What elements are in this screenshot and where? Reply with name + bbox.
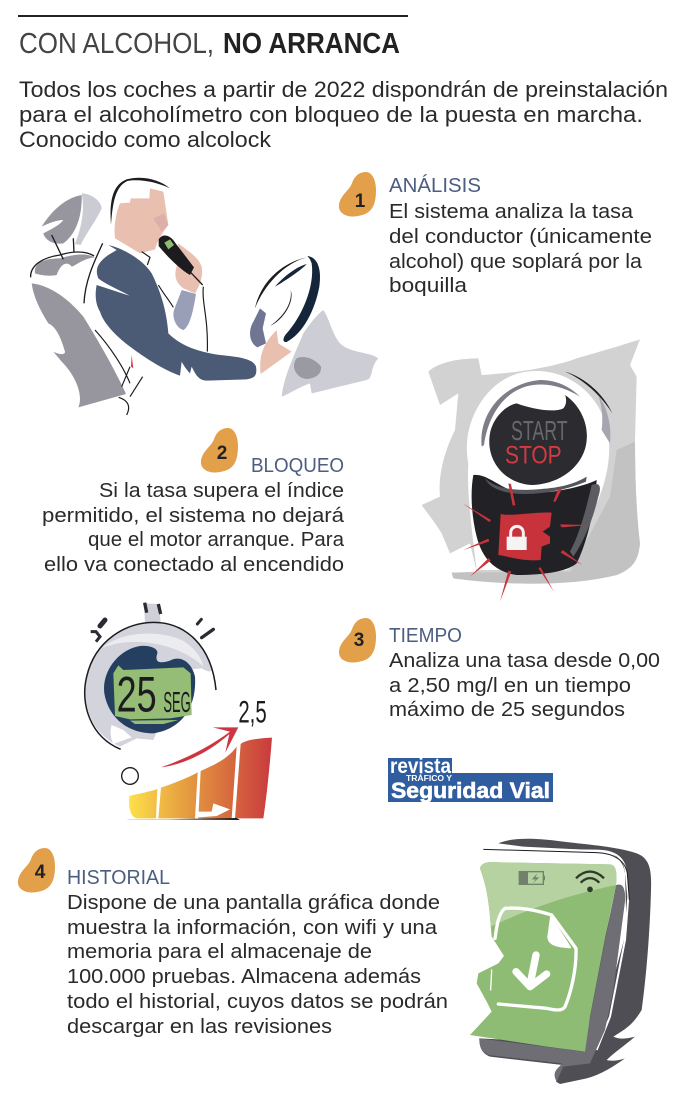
- red lock: [498, 513, 552, 560]
- text: análisis: del conductor (únicamente: [389, 226, 652, 248]
- breathalyzer: [159, 235, 194, 275]
- jacket: [96, 245, 256, 381]
- text: tiempo: a 2,50 mg/l en un tiempo: [389, 675, 631, 697]
- intro text: Conocido como alcolock: [19, 127, 272, 152]
- button bezel: [467, 371, 609, 570]
- logo: revista tráfico y seguridad vial: [388, 755, 553, 803]
- stopwatch: [85, 603, 216, 749]
- text: tiempo: [389, 625, 660, 721]
- text: bloqueo: ello va conectado al encendido: [44, 554, 344, 576]
- headrest and seat: [31, 193, 143, 415]
- text: historial: Dispone de una pantalla gráfica donde: [67, 892, 440, 914]
- text: análisis: [389, 174, 652, 297]
- illustration: start stop button: [422, 339, 640, 602]
- stopwatch: SEG: [163, 687, 191, 719]
- grey panel: [422, 339, 640, 584]
- badge 4: [18, 848, 55, 893]
- shirt lines: [142, 252, 207, 352]
- timer label: 25: [117, 666, 157, 722]
- badge 1: [339, 172, 376, 217]
- hand on wheel: [260, 330, 292, 374]
- badge 3: [339, 618, 376, 663]
- dashboard: [282, 310, 378, 397]
- steering wheel: [255, 257, 307, 308]
- text: análisis: boquilla: [389, 275, 468, 297]
- head: [115, 188, 168, 253]
- screen: [470, 862, 616, 1052]
- black lower housing: [472, 475, 597, 575]
- red rays: [463, 483, 590, 602]
- stop label: STOP: [505, 441, 562, 469]
- intro text: Todos los coches a partir de 2022 dispondrán de preinstalación: [19, 77, 668, 102]
- text: historial: todo el historial, cuyos datos se podrán: [67, 991, 448, 1013]
- title: CON ALCOHOL,: [19, 28, 214, 60]
- text: análisis: El sistema analiza la tasa: [389, 201, 634, 223]
- text: análisis: ANÁLISIS: [389, 174, 481, 197]
- icon: file download: [491, 908, 576, 1010]
- intro text: para el alcoholímetro con bloqueo de la puesta en marcha.: [19, 102, 643, 127]
- text: bloqueo: [42, 455, 345, 576]
- gauge value: 2,5: [238, 694, 267, 730]
- illustration: device with download: [470, 839, 651, 1084]
- logo: revista tráfico y seguridad vial: Seguridad Vial: [391, 778, 550, 803]
- illustration: driver blowing into breathalyzer: [31, 178, 378, 415]
- badge 3: 3: [354, 630, 364, 651]
- text: historial: muestra la información, con wifi y una: [67, 917, 438, 939]
- text: historial: memoria para el almacenaje de: [67, 941, 372, 963]
- icon: wifi: [576, 872, 604, 891]
- text: historial: [67, 867, 448, 1038]
- badge 2: [201, 428, 238, 473]
- text: bloqueo: Si la tasa supera el índice: [99, 480, 344, 502]
- intro text: [19, 77, 668, 152]
- text: bloqueo: que el motor arranque. Para: [88, 529, 345, 551]
- text: historial: descargar en las revisiones: [67, 1016, 332, 1038]
- text: análisis: alcohol) que soplará por la: [389, 251, 643, 273]
- icon: battery: [519, 872, 545, 884]
- text: bloqueo: BLOQUEO: [251, 455, 344, 477]
- gauge: [122, 694, 272, 820]
- text: tiempo: TIEMPO: [389, 625, 462, 647]
- logo: revista tráfico y seguridad vial: TRÁFICO Y: [406, 774, 453, 783]
- illustration: stopwatch and gauge: [85, 603, 272, 820]
- text: historial: HISTORIAL: [67, 867, 170, 889]
- button face: [489, 395, 587, 485]
- badge 4: 4: [35, 862, 46, 883]
- hand and cuff: [175, 243, 202, 293]
- text: tiempo: Analiza una tasa desde 0,00: [389, 650, 660, 672]
- badge 2: 2: [217, 443, 227, 464]
- text: bloqueo: permitido, el sistema no dejará: [42, 505, 345, 527]
- badge 1: 1: [355, 191, 366, 212]
- start label: START: [511, 415, 568, 446]
- logo: revista tráfico y seguridad vial: revista: [390, 755, 451, 778]
- device body: [479, 839, 651, 1084]
- text: historial: 100.000 pruebas. Almacena además: [67, 966, 421, 988]
- title: [19, 28, 400, 60]
- text: tiempo: máximo de 25 segundos: [389, 699, 625, 721]
- title: NO ARRANCA: [223, 28, 400, 60]
